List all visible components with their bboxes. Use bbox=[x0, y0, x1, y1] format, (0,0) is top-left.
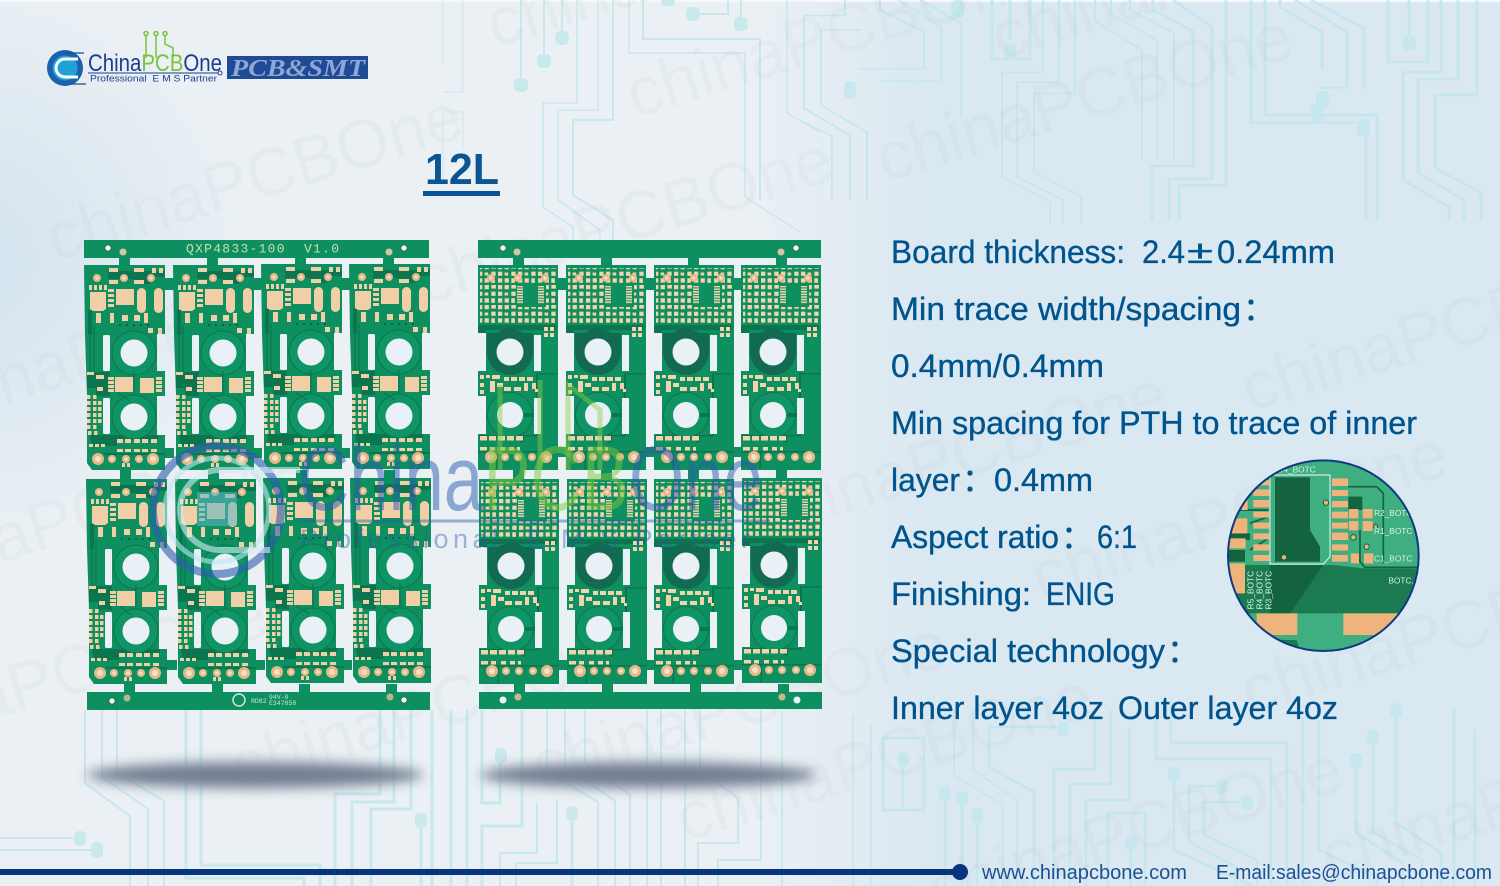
spec: aspect ratio: 6:1 bbox=[1097, 519, 1137, 555]
spec: min trace width: Min trace width/spacing bbox=[891, 291, 1241, 327]
front top row units bbox=[84, 264, 430, 470]
front top rail bbox=[84, 240, 429, 258]
background watermarks: chinaPCBOne bbox=[522, 606, 956, 804]
background watermarks: chinaPCBOne bbox=[867, 0, 1301, 196]
spec: finishing: Finishing: bbox=[891, 576, 1031, 612]
PCB&SMT badge: PCB&SMT bbox=[230, 56, 367, 82]
spec: finishing bbox=[891, 576, 1115, 612]
spec: board thickness: 0.24mm bbox=[1217, 234, 1335, 270]
logo: ChinaPCBOne PCB&SMT bbox=[47, 32, 368, 86]
logo tagline: Professional E M S Partner bbox=[90, 74, 217, 84]
PCB panel: front bbox=[84, 240, 431, 710]
circular board close-up: BOTC, bbox=[1388, 575, 1414, 585]
spec: special technology: ： bbox=[1167, 633, 1199, 669]
spec: board thickness: Board thickness: bbox=[891, 234, 1125, 270]
back top rail bbox=[478, 240, 821, 258]
spec: copper layers: Inner layer 4oz bbox=[891, 690, 1104, 726]
front bottom rail: RD82 bbox=[251, 698, 267, 705]
spec: PTH value bbox=[891, 462, 1093, 498]
front bottom rail: 94V-0 bbox=[269, 694, 289, 701]
background watermarks: chinaPCBOne bbox=[1022, 416, 1456, 614]
circular board close-up: R4_BOTC bbox=[1255, 571, 1265, 609]
watermark tagline: Professional E M S Partner bbox=[300, 524, 750, 554]
back bottom row units bbox=[479, 478, 822, 684]
spec: PTH spacing: Min spacing for PTH to trace of inner bbox=[891, 405, 1417, 441]
back bottom rail bbox=[479, 692, 822, 709]
spec: board thickness bbox=[891, 234, 1335, 270]
watermark wordmark: ChinaPCBOne bbox=[298, 428, 763, 530]
board shadow left bbox=[87, 762, 423, 788]
spec: aspect ratio bbox=[891, 519, 1137, 555]
spec: PTH value: layer bbox=[891, 462, 960, 498]
footer email: E-mail:sales@chinapcbone.com bbox=[1216, 862, 1492, 884]
background watermarks: chinaPCBOne bbox=[222, 606, 656, 804]
spec: copper layers bbox=[891, 690, 1338, 726]
spec: special technology: Special technology bbox=[891, 633, 1165, 669]
circular board close-up: R5_BOTC bbox=[1245, 571, 1255, 609]
circular board close-up: R2_BOTC bbox=[1374, 508, 1412, 518]
circular board close-up: R1_BOTC bbox=[1374, 526, 1412, 536]
PCB panel: back bbox=[478, 240, 822, 709]
spec: trace value: 0.4mm/0.4mm bbox=[891, 348, 1104, 384]
spec: min trace width: ： bbox=[1243, 291, 1275, 327]
logo wordmark: ChinaPCBOne bbox=[88, 50, 222, 77]
background watermarks: chinaPCBOne bbox=[667, 658, 1101, 856]
spec: board thickness: 2.4 bbox=[1142, 234, 1185, 270]
large logo watermark over boards bbox=[153, 380, 770, 574]
front bottom rail bbox=[87, 692, 430, 710]
logo globe icon bbox=[47, 50, 86, 86]
background watermarks: chinaPCBOne bbox=[37, 78, 471, 276]
watermark circuit strokes bbox=[500, 380, 600, 470]
back top row units bbox=[478, 265, 821, 470]
specification text block bbox=[891, 234, 1417, 726]
spec: aspect ratio: Aspect ratio bbox=[891, 519, 1059, 555]
spec: PTH value: 0.4mm bbox=[994, 462, 1093, 498]
logo circuit strokes bbox=[144, 32, 173, 58]
circular board close-up bbox=[1227, 459, 1420, 652]
spec: copper layers: Outer layer 4oz bbox=[1118, 690, 1338, 726]
front bottom row units bbox=[86, 478, 431, 684]
heading: 12L: 12L bbox=[425, 145, 499, 194]
circular board close-up: R3_BOTC bbox=[1264, 571, 1274, 609]
watermark globe bbox=[153, 446, 300, 574]
footer line with dot bbox=[0, 864, 968, 880]
front top rail: QXP4833-100 V1.0 bbox=[186, 242, 339, 256]
spec: aspect ratio: ： bbox=[1061, 519, 1093, 555]
spec: board thickness: ± bbox=[1187, 234, 1213, 270]
footer website: www.chinapcbone.com bbox=[981, 862, 1187, 884]
circular board close-up: C1_BOTC bbox=[1374, 554, 1412, 564]
front connector tabs bbox=[119, 258, 397, 693]
spec: finishing: ENIG bbox=[1046, 576, 1115, 612]
background watermarks: chinaPCBOne bbox=[407, 121, 841, 319]
front bottom rail: E347858 bbox=[269, 700, 296, 707]
spec: PTH value: ： bbox=[962, 462, 994, 498]
background watermarks: chinaPCBOne bbox=[742, 356, 1176, 554]
circular board close-up: U4_BOTC bbox=[1277, 465, 1316, 475]
board shadow right bbox=[480, 762, 816, 788]
back connector tabs bbox=[513, 258, 789, 693]
